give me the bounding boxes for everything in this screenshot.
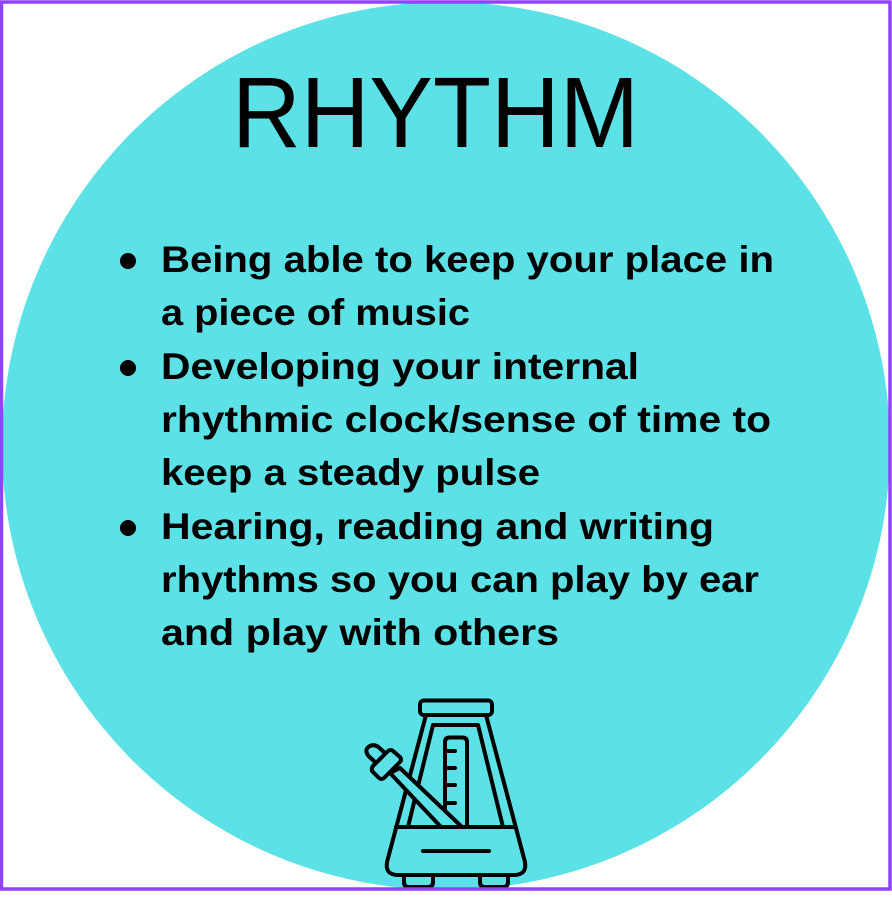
bullet item 1: Being able to keep your place in [161,239,774,280]
metronome feet [404,875,508,887]
bullet item 2: keep a steady pulse [161,452,540,493]
title: RHYTHM [232,57,639,169]
bullet item 3 [120,506,759,653]
bullet item 3: and play with others [161,612,559,653]
bullet item 3: rhythms so you can play by ear [161,559,759,600]
metronome base line [423,849,489,853]
icon: metronome [366,700,525,887]
bullet list [120,239,774,653]
metronome scale column [445,738,467,827]
metronome body [387,715,525,875]
metronome top cap [420,700,492,715]
bullet item 3: Hearing, reading and writing [161,506,714,547]
metronome knob [366,745,386,762]
bullet item 2: Developing your internal [161,346,639,387]
metronome weight [372,750,401,779]
bullet item 1: a piece of music [161,292,470,333]
bullet item 2 [120,346,771,493]
bullet item 1 [120,239,774,333]
metronome pendulum arm [390,768,462,827]
metronome inner frame [396,725,515,827]
bullet item 2: rhythmic clock/sense of time to [161,399,771,440]
